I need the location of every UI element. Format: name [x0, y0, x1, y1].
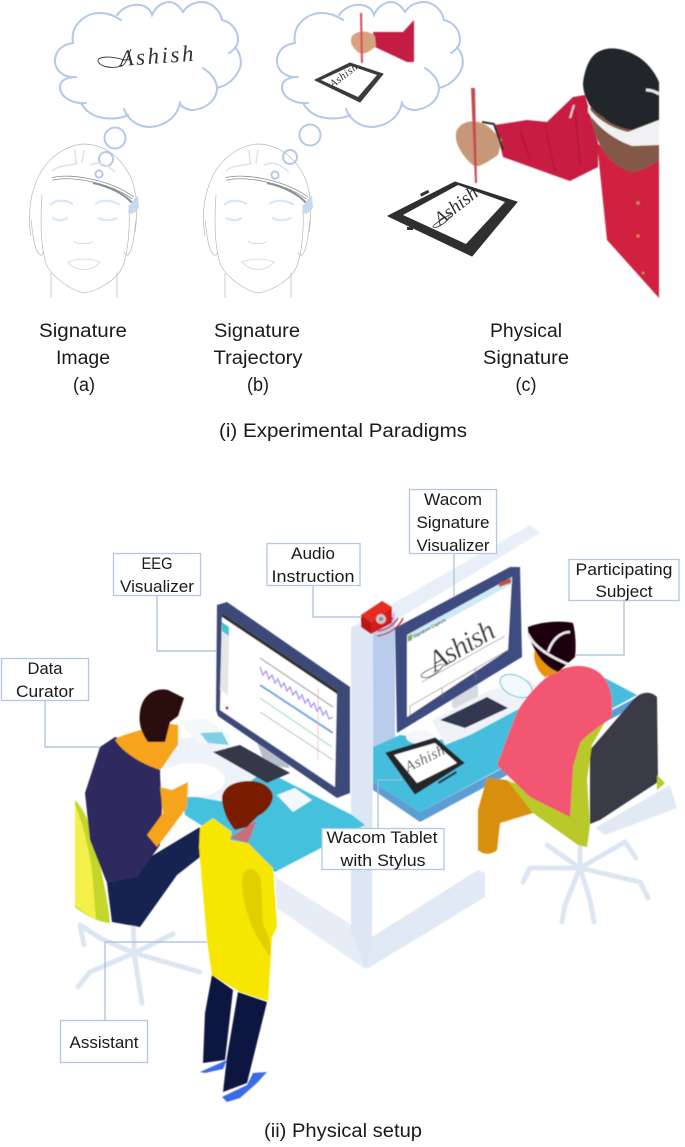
- right chair base: [523, 842, 648, 922]
- participating subject: [478, 622, 677, 922]
- right chair back: [590, 693, 658, 824]
- EEG headset: [588, 107, 659, 146]
- Wacom tablet (c): Ashish: [429, 183, 482, 231]
- tablet in cloud (b): Ashish: [327, 61, 360, 91]
- caption: Physical Signature (c): Physical: [490, 321, 562, 342]
- hair: [140, 689, 184, 742]
- face: [590, 107, 659, 172]
- Wacom tablet (c): [388, 182, 517, 256]
- Wacom tablet on desk: [386, 738, 464, 794]
- stylus: [471, 88, 477, 183]
- EEG sidebar: [220, 622, 229, 695]
- subject hair: [528, 622, 576, 672]
- torso: [85, 737, 162, 883]
- right chair seat: [595, 785, 677, 835]
- thought cloud (a): [55, 2, 241, 178]
- left chair base: [78, 913, 200, 1003]
- label: Assistant: [60, 942, 207, 1062]
- shoes: [200, 1060, 227, 1073]
- thought bubbles (b): [271, 124, 320, 179]
- label: Wacom Signature Visualizer: Wacom: [424, 491, 482, 509]
- label: Audio Instruction: [267, 544, 362, 617]
- coat: [199, 818, 277, 1001]
- subject headset: [528, 632, 570, 665]
- arm: [147, 782, 188, 847]
- caption: Signature Trajectory (b): (b): [247, 375, 269, 396]
- watch strap: [482, 122, 503, 150]
- label: Wacom Tablet with Stylus: Wacom Tablet: [326, 829, 438, 847]
- left chair: [75, 800, 110, 923]
- assistant: [199, 781, 277, 1102]
- legs: [203, 975, 233, 1063]
- label: EEG Visualizer: Visualizer: [120, 578, 195, 596]
- keyboard tray: [432, 680, 545, 745]
- label: Audio Instruction: Instruction: [272, 568, 354, 586]
- left keyboard: [213, 745, 290, 783]
- label: Wacom Signature Visualizer: Visualizer: [416, 537, 490, 555]
- partition panel side: [373, 612, 395, 760]
- physical setup illustration: [75, 525, 677, 1102]
- signature visualizer monitor: Ashish: [421, 614, 501, 679]
- tablet in cloud (b): [315, 61, 383, 102]
- caption: Physical Signature (c): Signature: [483, 348, 569, 369]
- signature in cloud (a): Ashish: [117, 41, 194, 71]
- partition foot: [275, 870, 485, 969]
- label: Data Curator: [2, 658, 100, 747]
- right monitor stand: [452, 675, 478, 710]
- thought cloud (b): [271, 2, 463, 179]
- signature visualizer monitor: [395, 567, 522, 733]
- heading: (ii) Physical setup: (ii) Physical setup: [264, 1121, 422, 1142]
- caption: Signature Trajectory (b): [214, 321, 303, 396]
- trousers: [107, 827, 200, 927]
- caption: Physical Signature (c): [483, 321, 569, 396]
- label: Participating Subject: Participating: [576, 561, 672, 579]
- partition post: [351, 622, 373, 969]
- shirt buttons: [636, 201, 644, 274]
- label: Wacom Tablet with Stylus: with Stylus: [339, 852, 426, 870]
- pink sweater: [497, 666, 612, 817]
- thought bubbles (a): [95, 128, 126, 178]
- hand: [456, 121, 502, 166]
- caption: Physical Signature (c): (c): [516, 375, 536, 396]
- signature visualizer monitor: Signature Capture: [412, 617, 447, 639]
- EEG monitor: [216, 602, 350, 798]
- window title bar: [407, 577, 512, 642]
- left monitor stand: [257, 742, 290, 768]
- torso: [597, 143, 659, 298]
- Wacom tablet on desk: Ashish: [402, 743, 448, 776]
- heading: (i) Experimental Paradigms: (i) Experimental Paradigms: [219, 421, 467, 442]
- label: Wacom Signature Visualizer: Signature: [416, 514, 490, 532]
- right desk: [373, 678, 637, 822]
- caption: Signature Trajectory (b): Trajectory: [214, 348, 303, 369]
- caption: Signature Image (a): (a): [73, 375, 95, 396]
- left mouse: [277, 788, 312, 812]
- label: Data Curator: Curator: [16, 683, 75, 701]
- partition top rail: [352, 525, 540, 634]
- head with EEG headset (b): [203, 144, 313, 298]
- data curator: [75, 689, 200, 1003]
- label: Wacom Signature Visualizer: [410, 490, 496, 597]
- physical signature: person writing (c): [456, 48, 659, 298]
- right keyboard: [440, 697, 508, 728]
- mouse: [496, 670, 536, 702]
- label: EEG Visualizer: EEG: [142, 555, 172, 573]
- label: Audio Instruction: Audio: [291, 545, 335, 563]
- neck and collar: [115, 722, 178, 770]
- label: Participating Subject: Subject: [596, 583, 653, 601]
- label: EEG Visualizer: [114, 554, 216, 651]
- chair lining: [505, 708, 613, 847]
- left desk: [159, 718, 365, 872]
- signature line and buttons: [410, 636, 508, 716]
- EEG top bar: [222, 613, 337, 694]
- white desk mouse: [406, 730, 434, 744]
- caption: Signature Image (a): Signature: [39, 321, 127, 342]
- caption: Signature Image (a): [39, 321, 127, 396]
- caption: Signature Image (a): Image: [56, 348, 110, 369]
- hair: [222, 781, 273, 830]
- label: Participating Subject: [569, 560, 679, 655]
- neck: [230, 820, 257, 843]
- writing arm in cloud (b): [351, 13, 414, 63]
- EEG traces: [260, 658, 333, 760]
- subject skin: [534, 650, 560, 677]
- label: Data Curator: Data: [28, 660, 63, 678]
- red speaker: [361, 601, 403, 636]
- caption: Signature Trajectory (b): Signature: [214, 321, 300, 342]
- hair: [583, 48, 659, 130]
- head with EEG headset (a): [29, 144, 139, 298]
- arm: [495, 95, 598, 181]
- label: Assistant: Assistant: [70, 1034, 139, 1052]
- label: Wacom Tablet with Stylus: [322, 780, 444, 870]
- orange trousers: [478, 778, 533, 854]
